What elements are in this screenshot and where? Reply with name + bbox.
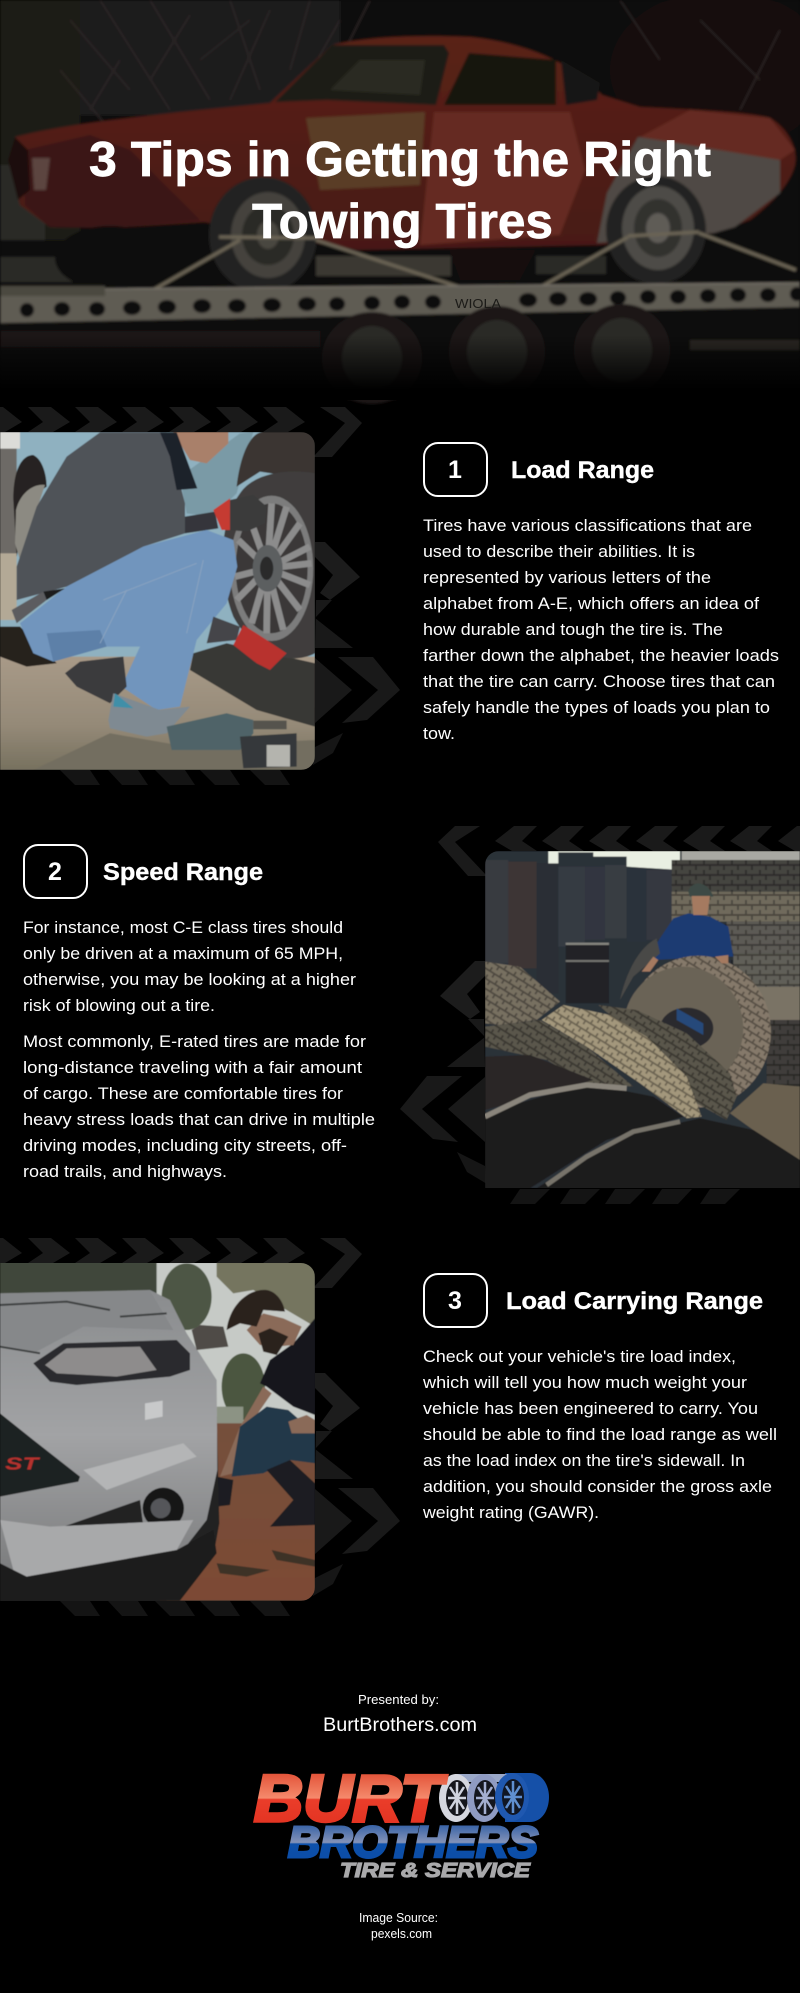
step 2 badge — [24, 845, 87, 898]
step 1 text — [423, 516, 779, 743]
step 1 text: represented by various letters of the — [423, 568, 711, 587]
step 3 text — [422, 1347, 777, 1522]
photo: mechanic changing a wheel — [0, 432, 315, 770]
step 2 text: For instance, most C-E class tires should — [23, 918, 343, 937]
step 2 badge: 2 — [48, 858, 62, 886]
image source: pexels.com — [371, 1926, 432, 1941]
step 2 text: long-distance traveling with a fair amount — [23, 1058, 362, 1077]
chevron pattern: section 3 — [0, 1238, 400, 1616]
hero photo: car on flatbed trailer: WIOLA — [455, 296, 501, 311]
title: Towing Tires — [252, 195, 553, 249]
step 3 badge — [424, 1274, 487, 1327]
photo: man with stacks of truck tires — [485, 851, 800, 1188]
step 2 text: risk of blowing out a tire. — [23, 996, 215, 1015]
step 1 badge — [424, 443, 487, 496]
logo word: Burt: BURT — [254, 1761, 447, 1835]
step 1 text: farther down the alphabet, the heavier loads — [423, 646, 779, 665]
photo: man kneeling by silver car: ST — [5, 1453, 40, 1473]
step 2 text: Most commonly, E-rated tires are made for — [23, 1032, 366, 1051]
step 3 text: Check out your vehicle's tire load index, — [423, 1347, 736, 1366]
logo: Burt Brothers Tire & Service — [254, 1761, 549, 1882]
presented by: Presented by: — [358, 1692, 439, 1707]
step 3 text: should be able to find the load range as well — [423, 1425, 777, 1444]
step 1 text: used to describe their abilities. It is — [423, 542, 695, 561]
step 1 text: how durable and tough the tire is. The — [423, 620, 723, 639]
step 1 text: that the tire can carry. Choose tires that can — [423, 672, 775, 691]
step 2 text — [23, 918, 375, 1181]
step 1 text: Tires have various classifications that are — [423, 516, 752, 535]
chevron pattern: section 2 — [400, 826, 800, 1204]
step 1 text: alphabet from A-E, which offers an idea of — [423, 594, 759, 613]
hero photo: car on flatbed trailer — [0, 0, 800, 404]
website: BurtBrothers.com — [323, 1715, 477, 1736]
step 3 heading: Load Carrying Range — [506, 1288, 763, 1315]
step 1 heading: Load Range — [511, 457, 654, 484]
step 3 text: as the load index on the tire's sidewall. In — [423, 1451, 745, 1470]
front wheel — [209, 177, 317, 293]
step 2 heading: Speed Range — [103, 859, 263, 886]
image source: Image Source: — [359, 1910, 438, 1925]
step 2 text: only be driven at a maximum of 65 MPH, — [23, 944, 343, 963]
step 2 text: driving modes, including city streets, off- — [23, 1136, 347, 1155]
step 1 text: safely handle the types of loads you plan to — [423, 698, 770, 717]
photo: man kneeling by silver car — [0, 1262, 315, 1601]
step 3 text: vehicle has been engineered to carry. You — [423, 1399, 758, 1418]
step 2 text: of cargo. These are comfortable tires for — [23, 1084, 343, 1103]
step 3 badge: 3 — [448, 1287, 462, 1315]
rear wheel — [606, 176, 706, 284]
step 2 text: road trails, and highways. — [23, 1162, 227, 1181]
step 2 text: otherwise, you may be looking at a higher — [23, 970, 356, 989]
step 1 badge: 1 — [448, 456, 462, 484]
title: 3 Tips in Getting the Right — [89, 133, 711, 187]
step 1 text: tow. — [423, 724, 455, 743]
step 3 text: which will tell you how much weight your — [422, 1373, 747, 1392]
logo tagline: TIRE & SERVICE — [340, 1860, 531, 1882]
title — [89, 133, 711, 249]
logo word: Brothers: BROTHERS — [288, 1818, 538, 1867]
image source — [359, 1910, 438, 1941]
chevron pattern: section 1 — [0, 407, 400, 785]
step 3 text: addition, you should consider the gross axle — [423, 1477, 772, 1496]
step 2 text: heavy stress loads that can drive in multiple — [23, 1110, 375, 1129]
step 3 text: weight rating (GAWR). — [422, 1503, 599, 1522]
logo tires — [439, 1773, 549, 1822]
